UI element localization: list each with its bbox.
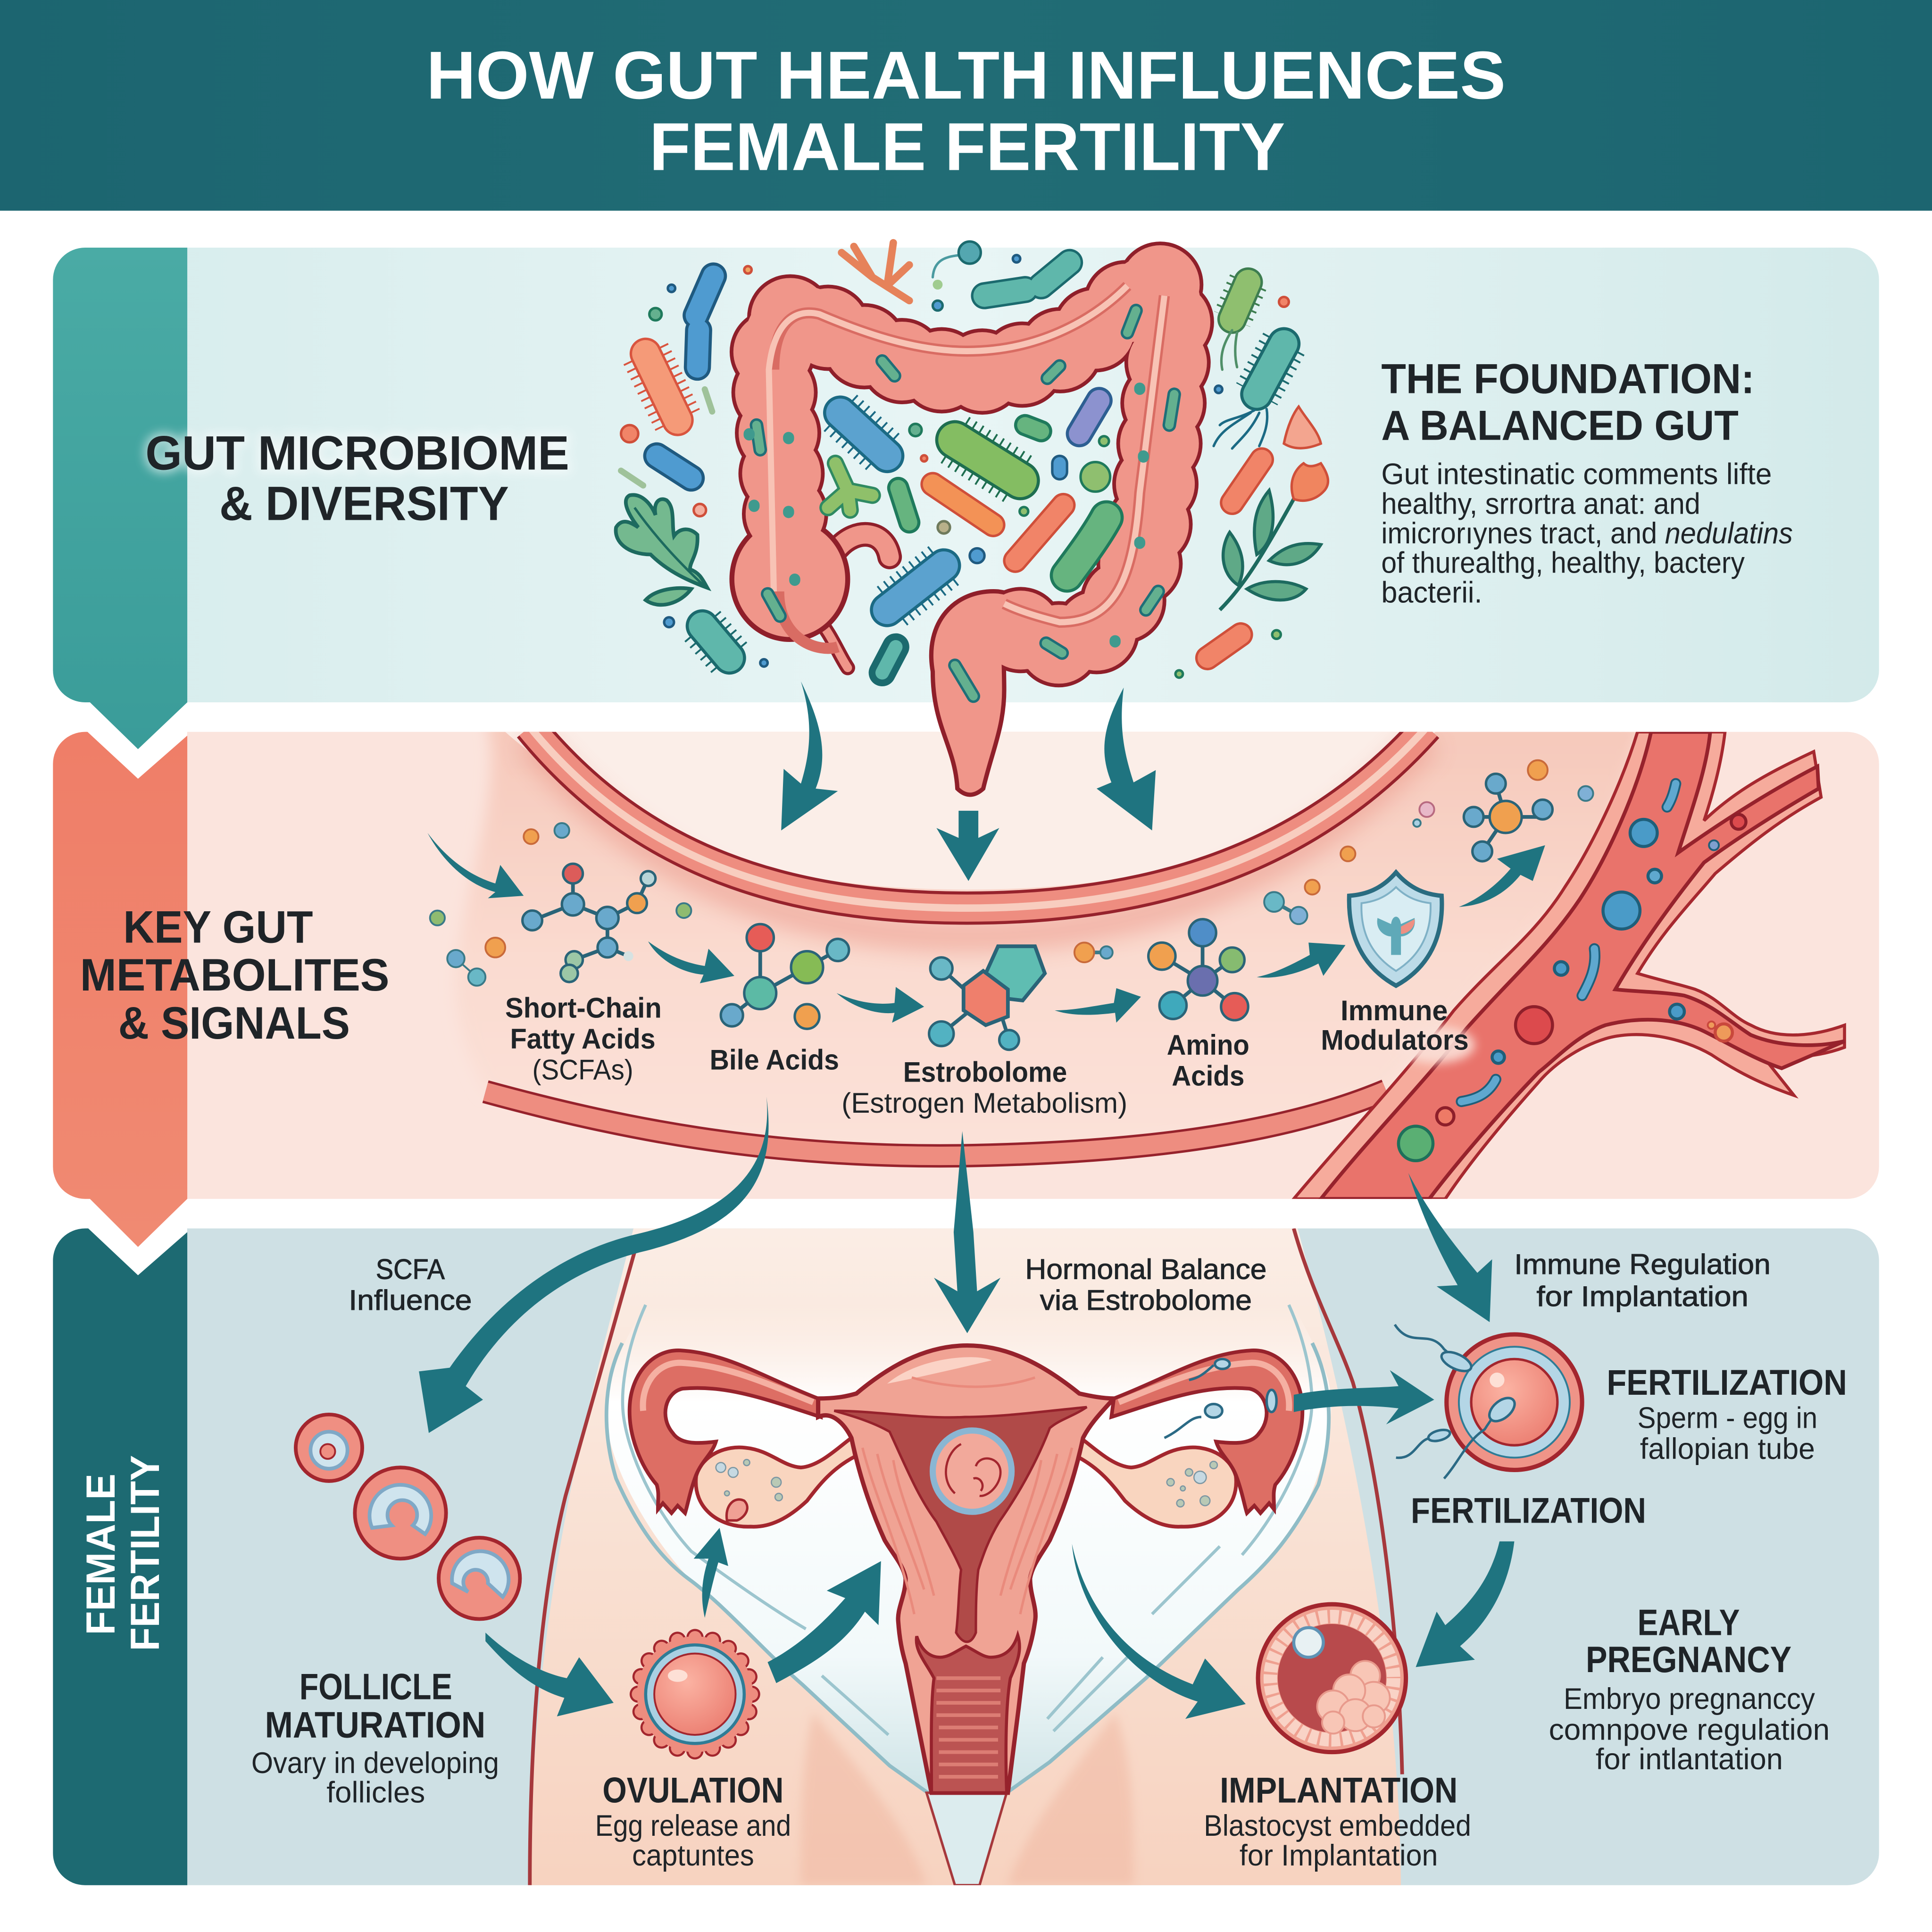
label: estrobolome: (Estrogen Metabolism) <box>841 1087 1127 1119</box>
icon: immune shield <box>1349 872 1442 986</box>
heading: gut microbiome: GUT MICROBIOME <box>145 426 569 480</box>
text block: fertilization: fallopian tube <box>1640 1432 1815 1466</box>
heading: gut microbiome: GUT MICROBIOME <box>145 426 569 480</box>
colon outline <box>729 516 850 642</box>
icon: colon <box>729 284 1174 795</box>
blue rods <box>657 276 713 478</box>
cervix <box>916 1635 1020 1793</box>
arrow: gut to metabolites left <box>781 682 838 831</box>
label: amino acids <box>1167 1029 1249 1091</box>
title <box>426 38 1506 184</box>
label: amino acids: Acids <box>1172 1060 1244 1091</box>
orange rods <box>933 459 1262 658</box>
text block: follicle maturation <box>251 1666 499 1809</box>
spiked blue bacteria <box>841 413 944 610</box>
label: estrobolome <box>841 1057 1127 1119</box>
label: amino acids: Amino <box>1167 1029 1249 1061</box>
label: hormonal balance: via Estrobolome <box>1040 1284 1252 1316</box>
molecule: short-chain fatty acids <box>523 864 656 982</box>
blood vessel <box>1294 732 1845 1199</box>
label: immune regulation <box>1514 1249 1771 1312</box>
icon: fertilization egg <box>1165 1324 1582 1479</box>
text block: foundation body: imicrorıynes tract, and nedulatins <box>1381 517 1793 550</box>
heading: the foundation: A BALANCED GUT <box>1381 402 1739 449</box>
pelvis and body illustration <box>530 1214 1402 1898</box>
label: immune regulation: for Implantation <box>1536 1281 1749 1312</box>
arrow: uterus to implantation <box>1072 1544 1246 1719</box>
heading: key gut metabolites: & SIGNALS <box>118 998 350 1049</box>
blastocyst mass <box>1317 1661 1390 1733</box>
colon contents <box>749 310 1174 696</box>
icon: follicles <box>296 1415 520 1619</box>
intestinal lining and metabolite zone <box>456 721 1645 1156</box>
arrow: estrobolome to amino acids <box>1055 988 1141 1023</box>
icon: ovulation egg <box>637 1636 753 1752</box>
leg gap <box>926 1793 1007 1885</box>
text block: foundation body: bacterii. <box>1381 576 1482 609</box>
ovary follicle spots <box>716 1459 1217 1521</box>
terminal ileum <box>838 534 890 557</box>
label: immune modulators: Immune <box>1341 995 1448 1026</box>
arrow: SCFA to bile acids <box>648 941 734 983</box>
small blue rod <box>1057 463 1063 472</box>
panel: key gut metabolites <box>53 700 1879 1247</box>
text block: follicle maturation: FOLLICLE <box>300 1666 452 1707</box>
arrow: SCFA influence <box>419 1097 768 1433</box>
appendix <box>816 616 848 668</box>
text block: foundation body <box>1381 458 1793 609</box>
heading: the foundation: THE FOUNDATION: <box>1381 355 1755 402</box>
label: immune modulators <box>1321 995 1469 1056</box>
band label: female fertility <box>78 1455 168 1651</box>
arrow: amino acids to immune modulators <box>1257 942 1346 978</box>
right fallopian tube <box>1111 1350 1302 1513</box>
blood cells <box>1399 783 1746 1161</box>
band label: female fertility: FEMALE <box>78 1474 124 1635</box>
label: short-chain fatty acids: (SCFAs) <box>532 1054 633 1085</box>
green rods <box>898 425 1041 523</box>
text block: foundation body: Gut intestinatic comments lifte <box>1381 458 1772 491</box>
icon: left leaf <box>616 495 707 605</box>
branching coral <box>841 243 909 300</box>
inner thigh shading <box>801 1713 1133 1885</box>
text block: implantation <box>1204 1771 1471 1872</box>
label: estrobolome: Estrobolome <box>903 1057 1067 1088</box>
teal rods <box>882 262 1069 673</box>
text block: ovulation: captuntes <box>632 1839 754 1872</box>
heading: key gut metabolites: KEY GUT <box>123 902 313 952</box>
uterine cavity <box>834 1407 1087 1642</box>
left fallopian tube <box>630 1350 821 1513</box>
icon: right plant with flower <box>1220 407 1328 610</box>
molecule: bile acids <box>721 924 849 1029</box>
text block: early pregnancy: Embryo pregnanccy <box>1564 1682 1815 1715</box>
text block: follicle maturation: follicles <box>326 1776 425 1809</box>
label: fertilization stage: FERTILIZATION <box>1411 1491 1646 1531</box>
band label: female fertility: FERTILITY <box>123 1455 168 1651</box>
green cross bacterium <box>828 463 872 510</box>
heading: key gut metabolites: METABOLITES <box>80 950 389 1000</box>
title: HOW GUT HEALTH INFLUENCES <box>426 38 1506 113</box>
text block: early pregnancy: for intlantation <box>1596 1743 1783 1776</box>
arrow: follicles to ovulation <box>485 1632 614 1716</box>
arrow: gut to metabolites centre <box>936 811 999 881</box>
icon: implantation site <box>1258 1604 1406 1752</box>
spiked teal bacteria <box>702 344 1284 658</box>
text block: follicle maturation: Ovary in developing <box>251 1747 499 1780</box>
sperm <box>1165 1324 1519 1479</box>
flagella <box>1214 409 1267 449</box>
text block: fertilization: Sperm - egg in <box>1638 1402 1817 1435</box>
arrow: immune modulators to bloodstream <box>1459 845 1545 907</box>
colon band <box>774 286 1165 649</box>
floating microbes <box>621 242 1289 678</box>
spiked olive bacterium <box>1232 282 1248 319</box>
right ovary <box>1077 1438 1236 1527</box>
heading: gut microbiome: & DIVERSITY <box>219 476 509 530</box>
arrow: estrobolome to hormonal balance <box>934 1131 1000 1333</box>
panel: female fertility <box>53 1195 1879 1885</box>
arrow: ovulation to uterus <box>767 1561 881 1683</box>
wall stripes <box>863 1377 1072 1614</box>
arrow: immune regulation <box>1408 1173 1492 1322</box>
text block: foundation body: of thurealthg, healthy, bactery <box>1381 547 1745 580</box>
text block: fertilization <box>1607 1363 1847 1466</box>
text block: fertilization: FERTILIZATION <box>1607 1363 1847 1403</box>
text block: early pregnancy <box>1549 1601 1830 1776</box>
heading: key gut metabolites <box>80 902 389 1049</box>
label: immune regulation: Immune Regulation <box>1514 1249 1771 1280</box>
label: bile acids: Bile Acids <box>710 1044 839 1075</box>
title: FEMALE FERTILITY <box>650 109 1285 184</box>
left ovary <box>696 1438 855 1527</box>
molecule: amino acids <box>1149 919 1248 1020</box>
header banner <box>0 0 1932 211</box>
spiked green bacterium <box>955 440 1020 481</box>
label: SCFA influence: SCFA <box>376 1254 445 1285</box>
purple rod <box>1079 400 1099 434</box>
arrow: fertilization to implantation <box>1416 1541 1514 1667</box>
icon: uterus and ovaries <box>630 1346 1302 1793</box>
molecule: upper right <box>1464 774 1552 861</box>
text block: implantation: Blastocyst embedded <box>1204 1809 1471 1842</box>
body silhouette <box>530 1214 1401 1898</box>
arrow: bile acids to estrobolome <box>837 987 924 1023</box>
label: short-chain fatty acids: Short-Chain <box>505 992 662 1024</box>
text block: implantation: IMPLANTATION <box>1220 1771 1457 1811</box>
pelvic cavity <box>607 1305 1331 1793</box>
text block: ovulation <box>595 1771 791 1872</box>
arrow: gut to metabolites right <box>1097 688 1156 831</box>
heading: gut microbiome <box>145 426 569 530</box>
fundus highlight <box>887 1357 992 1384</box>
spiked orange bacterium <box>646 354 678 420</box>
text block: ovulation: Egg release and <box>595 1809 791 1842</box>
label: hormonal balance <box>1025 1254 1266 1316</box>
thin pale rods <box>621 389 712 485</box>
label: short-chain fatty acids: Fatty Acids <box>510 1023 656 1055</box>
label: short-chain fatty acids <box>505 992 662 1085</box>
arrow: tube to fertilization <box>1294 1370 1434 1424</box>
text block: early pregnancy: comnpove regulation <box>1549 1713 1830 1746</box>
text block: ovulation: OVULATION <box>602 1771 783 1811</box>
label: immune modulators: Modulators <box>1321 1024 1469 1056</box>
text block: early pregnancy: PREGNANCY <box>1586 1639 1791 1680</box>
label: SCFA influence: Influence <box>349 1284 472 1316</box>
panel: gut microbiome <box>53 248 1879 749</box>
label: hormonal balance: Hormonal Balance <box>1025 1254 1266 1285</box>
text block: implantation: for Implantation <box>1240 1839 1438 1872</box>
ball tail <box>933 255 961 277</box>
text block: foundation body: healthy, srrortra anat: and <box>1381 487 1700 520</box>
text block: early pregnancy: EARLY <box>1638 1601 1740 1643</box>
arrow: ovulation to ovary <box>694 1528 728 1618</box>
molecule: estrobolome <box>929 946 1045 1050</box>
floating metabolite particles <box>430 760 1593 986</box>
gut bacteria cluster <box>621 243 1284 673</box>
colon fill <box>734 521 845 637</box>
heading: the foundation <box>1381 355 1755 449</box>
text block: follicle maturation: MATURATION <box>265 1704 485 1745</box>
arrow: into short-chain fatty acids <box>427 833 524 898</box>
label: SCFA influence <box>349 1254 472 1316</box>
embryo capsule <box>933 1431 1012 1512</box>
uterus body <box>818 1346 1114 1793</box>
